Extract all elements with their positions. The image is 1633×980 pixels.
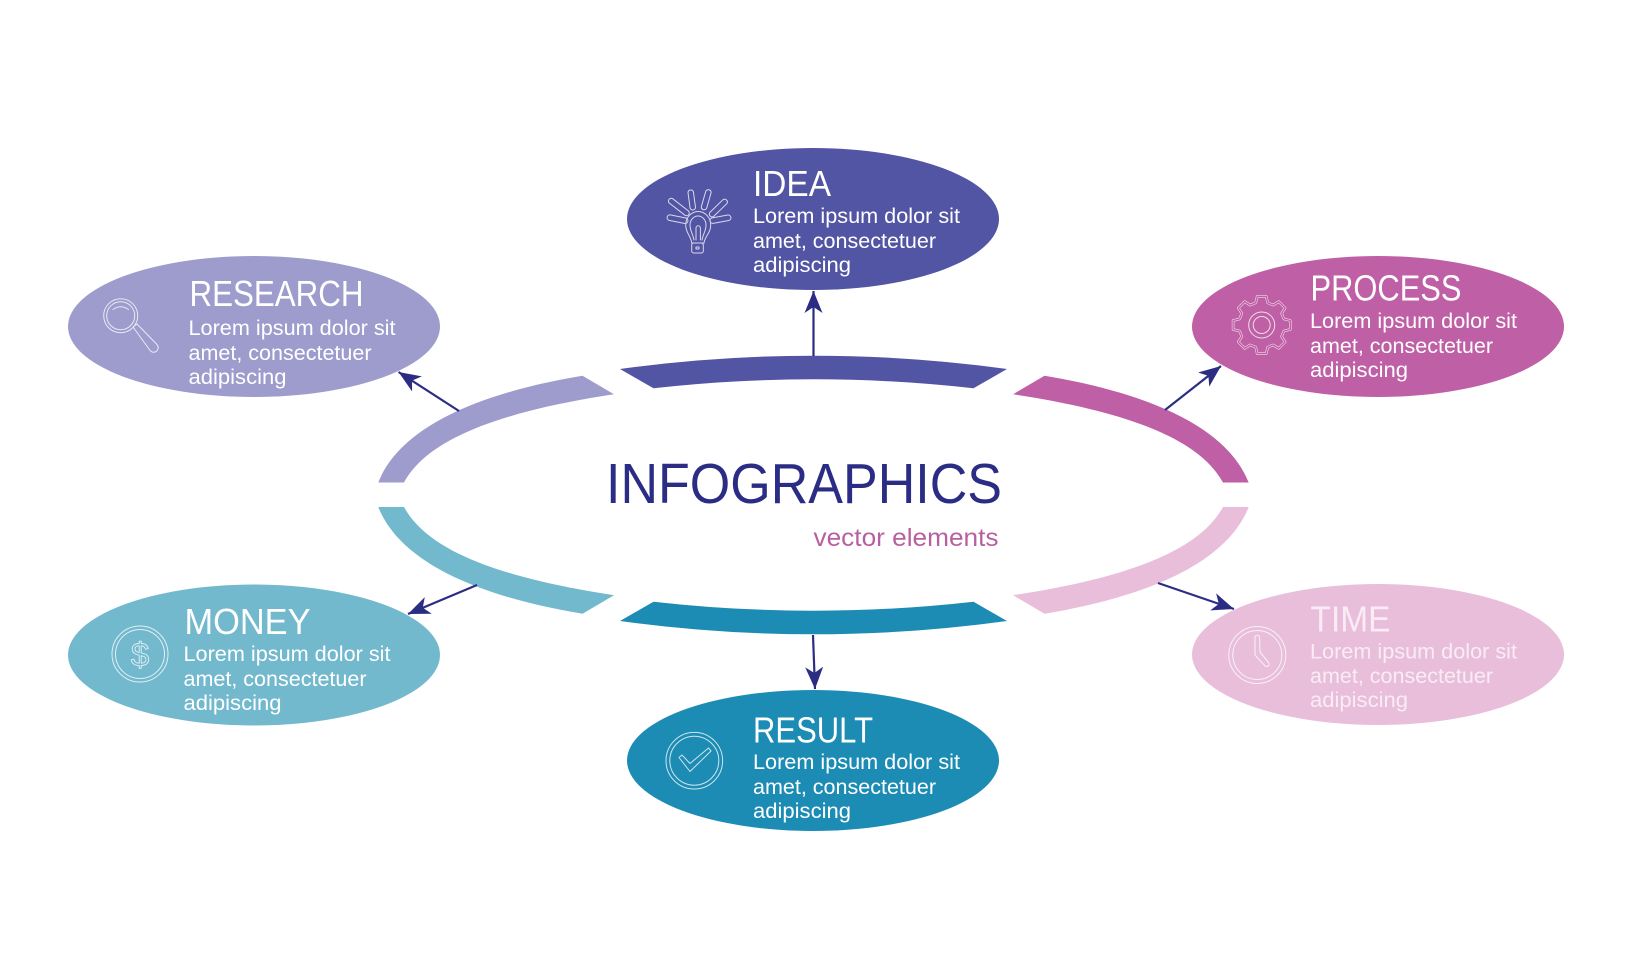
arrow: to result xyxy=(813,635,815,689)
text block: process: adipiscing xyxy=(1310,359,1408,382)
panel: time xyxy=(1192,584,1564,725)
panel: result xyxy=(627,690,999,831)
text block: money: Lorem ipsum dolor sit xyxy=(184,643,391,666)
heading: result: RESULT xyxy=(753,710,873,751)
text block: time: adipiscing xyxy=(1310,689,1408,712)
text block: idea xyxy=(753,205,960,277)
text block: result: Lorem ipsum dolor sit xyxy=(753,751,960,774)
ellipse: idea xyxy=(627,148,999,290)
central ring xyxy=(378,356,1249,634)
text block: research: Lorem ipsum dolor sit xyxy=(188,317,396,340)
text block: process: amet, consectetuer xyxy=(1310,335,1493,358)
icon: dollar coin xyxy=(112,626,168,682)
arrow: to money xyxy=(408,585,477,614)
text block: idea: adipiscing xyxy=(753,254,851,277)
text block: research: amet, consectetuer xyxy=(188,342,372,365)
ring segment: process xyxy=(1013,376,1249,482)
icon: magnifier xyxy=(104,299,158,352)
panel: idea xyxy=(627,148,999,290)
text block: process: Lorem ipsum dolor sit xyxy=(1310,310,1517,333)
panel: money xyxy=(68,584,440,726)
heading: research: RESEARCH xyxy=(190,273,364,314)
text block: result: adipiscing xyxy=(753,800,851,823)
ring segment: idea xyxy=(620,356,1007,388)
heading: money: MONEY xyxy=(184,601,310,642)
text block: time xyxy=(1310,640,1517,712)
panel: process xyxy=(1192,256,1564,397)
arrows xyxy=(398,291,1234,689)
arrow: to process xyxy=(1165,366,1221,410)
arrow: to idea xyxy=(812,291,815,356)
ellipse: money xyxy=(68,584,440,726)
icon: gear xyxy=(1233,296,1290,354)
title: INFOGRAPHICS xyxy=(606,452,1002,516)
panel: research xyxy=(68,256,440,397)
arrow: to research xyxy=(398,372,459,411)
heading: process: PROCESS xyxy=(1310,268,1462,309)
icon: light bulb xyxy=(667,190,731,253)
text block: idea: Lorem ipsum dolor sit xyxy=(753,205,960,228)
text block: idea: amet, consectetuer xyxy=(753,230,936,253)
icon: clock xyxy=(1229,626,1286,684)
text block: time: amet, consectetuer xyxy=(1310,665,1493,688)
ring segment: money xyxy=(378,507,614,614)
text block: money: adipiscing xyxy=(184,692,282,715)
ellipse: research xyxy=(68,256,440,397)
heading: idea: IDEA xyxy=(753,163,831,204)
ring segment: time xyxy=(1013,507,1249,614)
icon: dollar coin: $ xyxy=(131,636,149,673)
text block: money xyxy=(184,643,391,715)
text block: money: amet, consectetuer xyxy=(184,668,367,691)
text block: time: Lorem ipsum dolor sit xyxy=(1310,640,1517,663)
ellipse: result xyxy=(627,690,999,831)
heading: time: TIME xyxy=(1310,599,1390,640)
text block: research xyxy=(188,317,396,389)
icon: check mark xyxy=(666,732,723,789)
text block: process xyxy=(1310,310,1517,382)
ring segment: research xyxy=(378,376,614,482)
text block: result: amet, consectetuer xyxy=(753,776,936,799)
ring segment: result xyxy=(620,602,1007,634)
ellipse: time xyxy=(1192,584,1564,725)
subtitle: vector elements xyxy=(814,524,998,552)
arrow: to time xyxy=(1158,583,1234,609)
ellipse: process xyxy=(1192,256,1564,397)
text block: result xyxy=(753,751,960,823)
text block: research: adipiscing xyxy=(188,366,286,389)
